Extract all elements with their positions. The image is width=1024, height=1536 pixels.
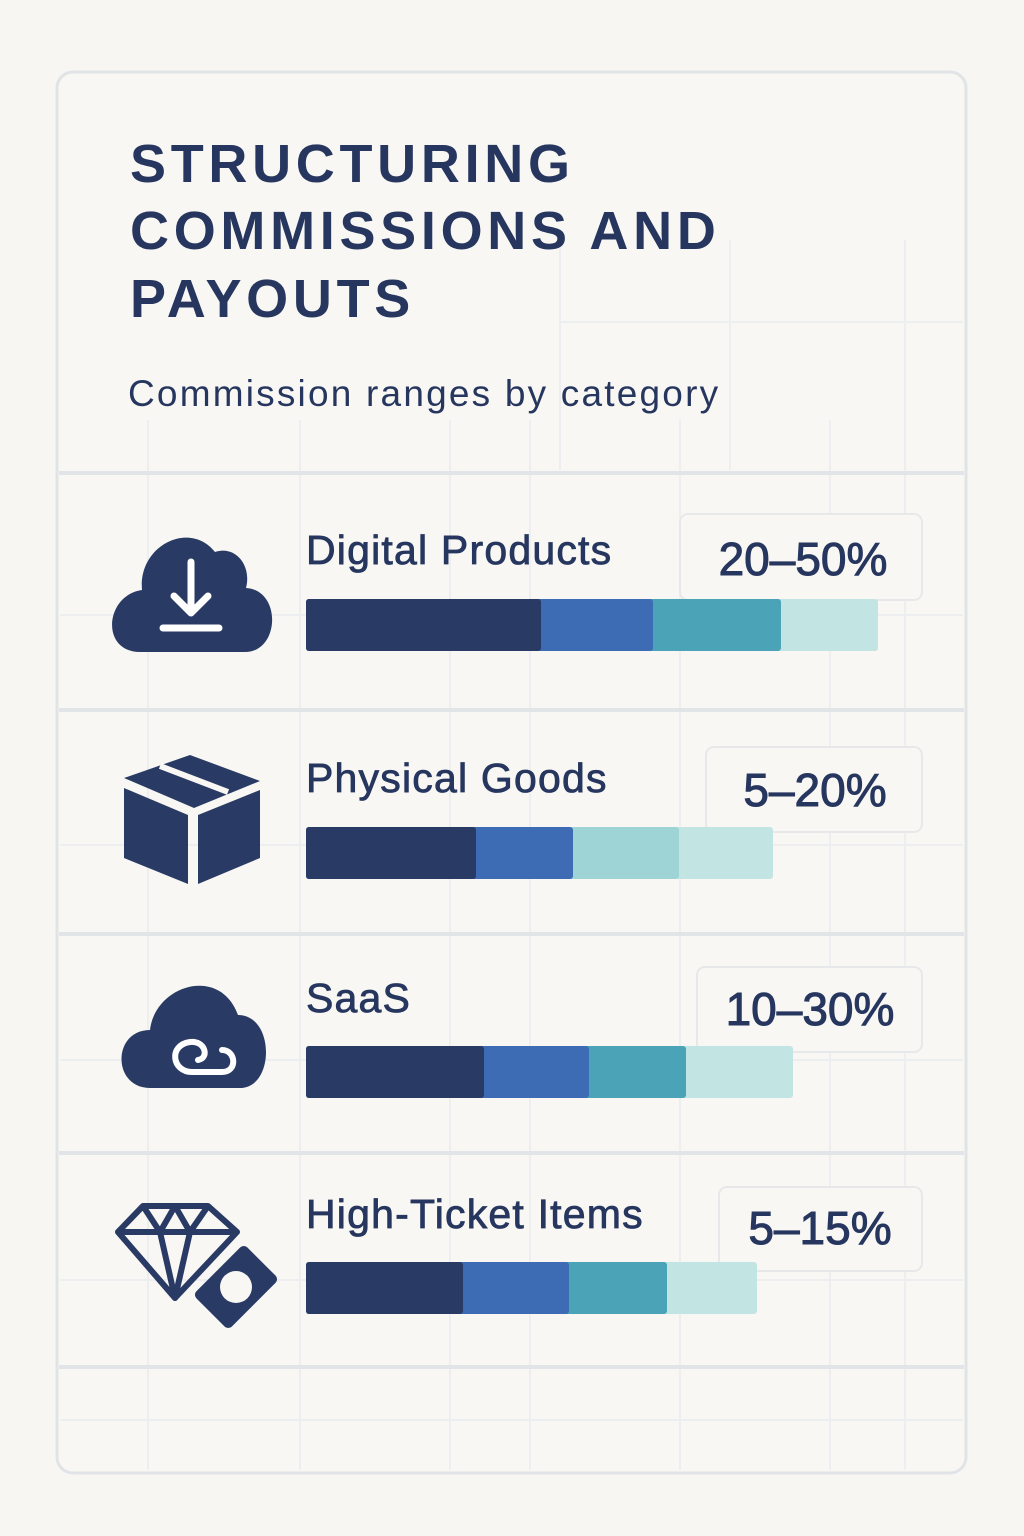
row: Physical Goods: Physical Goods <box>306 755 608 801</box>
subtitle: Commission ranges by category <box>128 373 720 414</box>
row: High-Ticket Items <box>118 1187 922 1330</box>
row: SaaS: SaaS <box>306 975 411 1021</box>
row: SaaS <box>122 967 922 1098</box>
row: Physical Goods <box>124 747 922 884</box>
icon: box <box>124 755 260 884</box>
title: STRUCTURING <box>130 134 575 194</box>
title: COMMISSIONS AND <box>130 201 721 261</box>
bar <box>306 599 878 651</box>
row: SaaS: 10–30% <box>726 983 894 1035</box>
row: Digital Products: Digital Products <box>306 527 612 573</box>
icon: cloud <box>122 986 266 1088</box>
row: Physical Goods: 5–20% <box>743 764 887 816</box>
title <box>130 134 721 329</box>
row: High-Ticket Items: High-Ticket Items <box>306 1191 644 1237</box>
icon: cloud download <box>112 538 272 652</box>
value box <box>680 514 922 600</box>
row: High-Ticket Items: 5–15% <box>748 1202 892 1254</box>
title: PAYOUTS <box>130 269 415 329</box>
value box: 20–50% <box>719 533 887 585</box>
row: Digital Products <box>112 514 922 652</box>
icon: diamond and ticket <box>118 1206 279 1330</box>
